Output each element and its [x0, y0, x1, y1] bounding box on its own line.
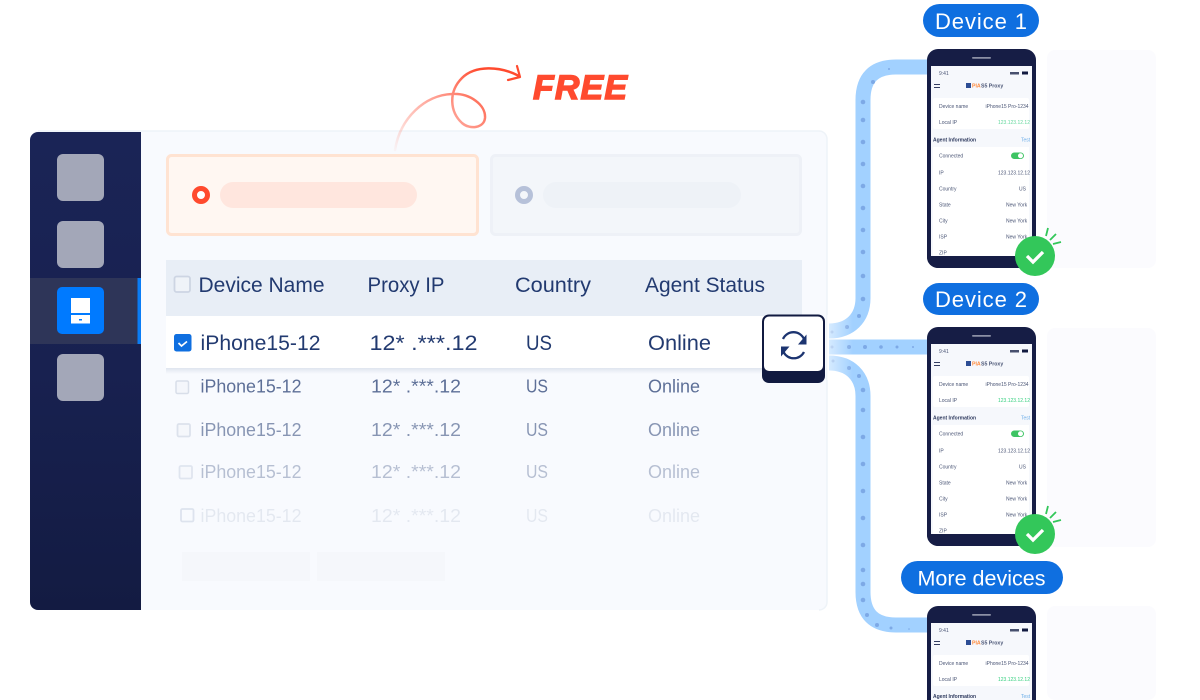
phone 1: 123.123.12.12	[998, 120, 1030, 126]
FREE label: FREE	[533, 69, 628, 107]
phone 1	[927, 49, 1036, 268]
more devices label	[901, 561, 1063, 594]
phone 2: New York	[1006, 480, 1028, 486]
phone 1 ghost panel	[1047, 50, 1156, 268]
dashboard panel	[30, 131, 827, 610]
phone 3	[927, 606, 1036, 700]
table row 5: iPhone15-12	[200, 506, 302, 526]
phone 2: ZIP	[939, 528, 947, 534]
phone 1: State	[939, 202, 951, 208]
footer buttons	[182, 552, 445, 581]
table row 3: US	[526, 420, 548, 440]
phone 1: 9:41	[939, 71, 949, 77]
phone 1: US	[1019, 186, 1027, 192]
phone 2 ghost panel	[1047, 328, 1156, 547]
table row 4	[180, 462, 700, 482]
table row 3: iPhone15-12	[200, 420, 302, 440]
phone 2: Test	[1021, 416, 1031, 422]
selected table row: 12* .***.12	[370, 331, 478, 355]
phone 2: Agent Information	[933, 416, 976, 422]
table row 2: iPhone15-12	[200, 376, 302, 396]
device 2 label: Device 2	[935, 287, 1027, 312]
table row 4: iPhone15-12	[200, 462, 302, 482]
phone 2: Local IP	[939, 398, 958, 404]
phone 1: Device name	[939, 104, 968, 110]
phone 3: PIA	[972, 640, 981, 646]
phone 3: Agent Information	[933, 694, 976, 700]
phone 1: Connected	[939, 154, 963, 160]
table header	[166, 260, 802, 316]
phone 2: New York	[1006, 512, 1028, 518]
phone 2: S5 Proxy	[981, 362, 1003, 368]
table row 2: US	[526, 376, 548, 396]
table row 4: 12* .***.12	[371, 462, 461, 482]
table row 4: US	[526, 462, 548, 482]
phone 3 ghost panel	[1047, 606, 1156, 700]
phone 1: 123.123.12.12	[998, 170, 1030, 176]
table row 5: Online	[648, 506, 700, 526]
sidebar item 2	[57, 221, 104, 268]
phone 1: Country	[939, 186, 957, 192]
table row 3: 12* .***.12	[371, 420, 461, 440]
phone 1: Test	[1021, 138, 1031, 144]
phone 1: PIA	[972, 84, 981, 90]
phone 2: 9:41	[939, 349, 949, 355]
phone 1: New York	[1006, 234, 1028, 240]
connector lines	[827, 67, 930, 630]
table header: Proxy IP	[368, 273, 444, 297]
device 2 label	[923, 283, 1039, 315]
phone 2: New York	[1006, 496, 1028, 502]
phone 1: IP	[939, 170, 944, 176]
phone 3: iPhone15 Pro-1234	[986, 661, 1029, 667]
phone 3: Test	[1021, 694, 1031, 700]
phone 2: 123.123.12.12	[998, 398, 1030, 404]
phone 1: New York	[1006, 218, 1028, 224]
sidebar item 1	[57, 154, 104, 201]
phone 2	[927, 327, 1036, 546]
selected table row: iPhone15-12	[200, 331, 320, 355]
phone 3: Device name	[939, 661, 968, 667]
device 1 label: Device 1	[935, 9, 1027, 34]
phone 1: ISP	[939, 234, 948, 240]
phone 2: 123.123.12.12	[998, 448, 1030, 454]
phone 3: Local IP	[939, 677, 958, 683]
phone 1: iPhone15 Pro-1234	[986, 104, 1029, 110]
phone 2: Device name	[939, 382, 968, 388]
phone 2 check badge	[1015, 506, 1061, 554]
table row 3: Online	[648, 420, 700, 440]
table row 2	[176, 376, 700, 396]
curl arrow	[395, 66, 520, 150]
phone 2: iPhone15 Pro-1234	[986, 382, 1029, 388]
sidebar	[30, 132, 141, 610]
phone 2: PIA	[972, 362, 981, 368]
phone 3: 9:41	[939, 628, 949, 634]
sidebar item 4	[57, 354, 104, 401]
phone 1: New York	[1006, 202, 1028, 208]
phone 1: Local IP	[939, 120, 958, 126]
more devices label: More devices	[918, 566, 1046, 590]
table row 4: Online	[648, 462, 700, 482]
phone 3: S5 Proxy	[981, 640, 1003, 646]
phone 1: ZIP	[939, 250, 947, 256]
table row 5	[181, 506, 700, 526]
active sidebar row	[30, 278, 141, 344]
table row 2: Online	[648, 376, 700, 396]
phone 3: 123.123.12.12	[998, 677, 1030, 683]
table row 2: 12* .***.12	[371, 376, 461, 396]
free plan card	[168, 156, 478, 234]
phone 1: S5 Proxy	[981, 84, 1003, 90]
phone 2: US	[1019, 464, 1027, 470]
selected table row	[166, 316, 806, 374]
table row 5: US	[526, 506, 548, 526]
second plan card	[492, 156, 800, 234]
selected table row: Online	[648, 331, 711, 355]
table header: Country	[515, 273, 591, 297]
phone 1 check badge	[1015, 228, 1061, 276]
phone 1: Agent Information	[933, 138, 976, 144]
phone 2: IP	[939, 448, 944, 454]
phone 1: City	[939, 218, 948, 224]
phone 2: City	[939, 496, 948, 502]
phone 2: Connected	[939, 432, 963, 438]
table row 3	[178, 420, 700, 440]
table row 5: 12* .***.12	[371, 506, 461, 526]
table header: Device Name	[198, 273, 324, 297]
device 1 label	[923, 4, 1039, 37]
phone 2: ISP	[939, 512, 948, 518]
selected table row: US	[526, 331, 552, 355]
phone 2: State	[939, 480, 951, 486]
sync button	[762, 314, 825, 383]
phone 2: Country	[939, 464, 957, 470]
table header: Agent Status	[645, 273, 765, 297]
